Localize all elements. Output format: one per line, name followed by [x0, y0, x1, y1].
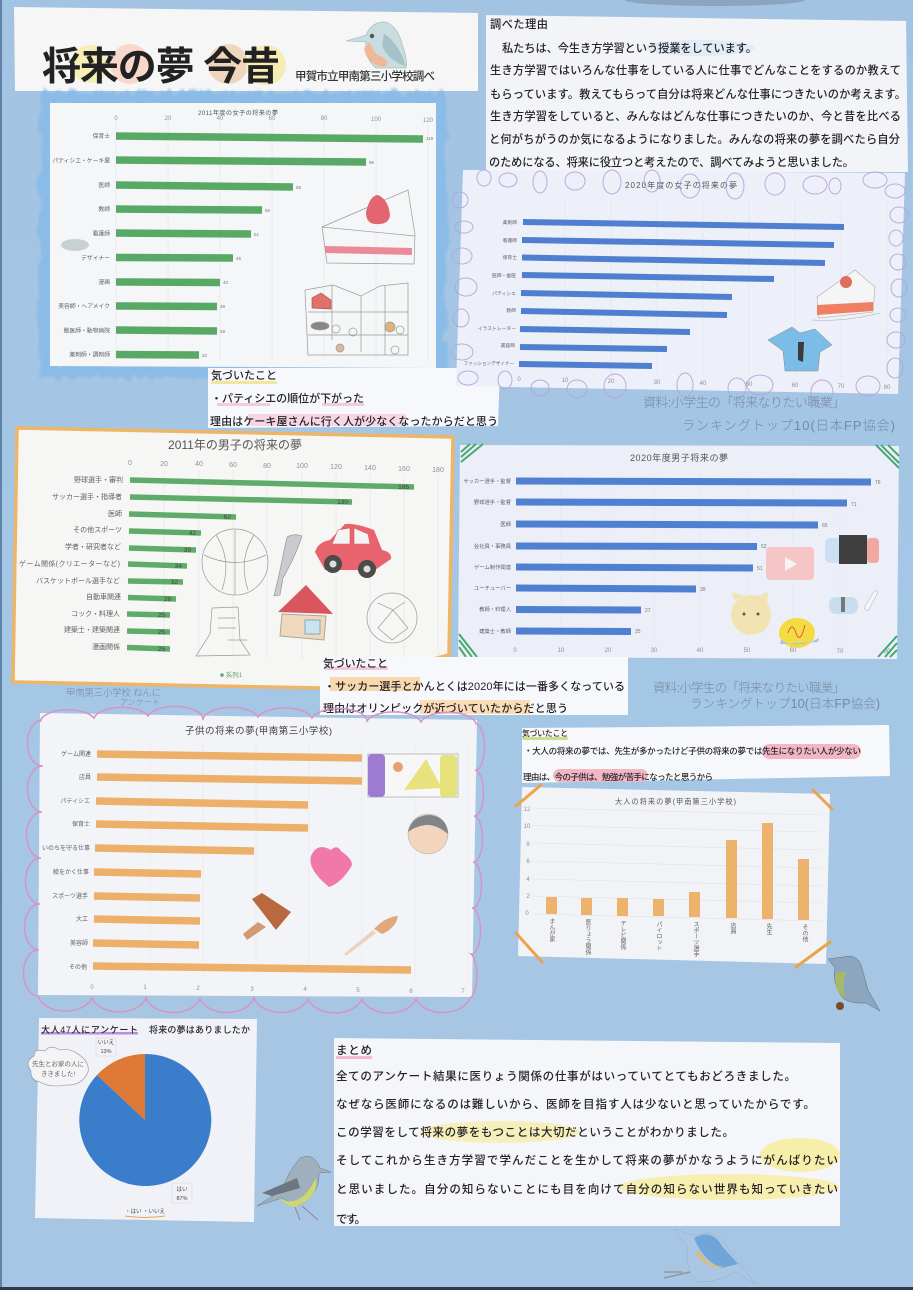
chart: adults: 8 — [526, 842, 530, 848]
panel: reason for research — [486, 15, 908, 172]
labels: ユーチューバー — [474, 585, 511, 592]
category labels: 獣医師・動物病院 — [64, 326, 110, 334]
axis: 3 — [250, 987, 254, 993]
label no — [96, 1038, 116, 1056]
paragraph: 生き方学習ではいろんな仕事をしている人に仕事でどんなことをするのか教えて — [490, 63, 901, 77]
category labels: デザイナー — [81, 254, 110, 262]
body text: この学習をして将来の夢をもつことは大切だということがわかりました。 — [336, 1125, 734, 1139]
note: boys: 理由はオリンピックが近づいていたからだと思う — [323, 701, 568, 715]
labels: スポーツ選手 — [52, 892, 88, 900]
labels: 教師・料理人 — [479, 605, 512, 613]
axis: 1 — [143, 985, 147, 991]
paragraph — [489, 41, 906, 169]
labels: 大工 — [76, 915, 88, 923]
axis: 20 — [605, 648, 612, 654]
axis: 50 — [746, 382, 753, 388]
category labels: 教師 — [98, 205, 110, 213]
category labels — [52, 132, 110, 358]
handwritten survey note: 甲南第三小学校 ねんに — [66, 687, 161, 699]
values: 39 — [184, 547, 191, 554]
source note: lower: 資料:小学生の「将来なりたい職業」 — [653, 681, 845, 695]
values: 51 — [254, 232, 260, 237]
chart: 2011 girls: 60 — [269, 116, 276, 122]
drawing: cake and shirt — [768, 270, 880, 371]
source note: upper — [643, 395, 895, 433]
icon: bird bottom left — [257, 1156, 331, 1220]
icon: kingfisher top — [346, 22, 406, 68]
body text: そしてこれから生き方学習で学んだことを生かして将来の夢がかなうようにがんばりたい — [336, 1153, 838, 1167]
category labels: 看護師 — [93, 230, 110, 238]
drawing: game console, face, heart, hammer, brush — [243, 754, 458, 956]
values: 52 — [761, 544, 767, 550]
labels: その他 — [801, 924, 808, 943]
chart: 2020 girls — [451, 170, 908, 404]
panel: pie chart survey — [28, 1018, 257, 1222]
bars — [519, 222, 844, 366]
chart: adults: 2 — [526, 894, 530, 900]
labels: 漫画関係 — [92, 642, 120, 651]
axis: 20 — [608, 379, 615, 385]
labels: サッカー選手・監督 — [463, 477, 512, 485]
values: 27 — [645, 608, 651, 614]
labels: ファッションデザイナー — [464, 360, 514, 367]
chart: 2020 boys — [458, 444, 899, 659]
axis: 50 — [744, 648, 751, 654]
values: 65 — [822, 523, 828, 529]
values: 42 — [189, 530, 196, 537]
panel: title — [14, 7, 478, 91]
labels — [19, 475, 123, 651]
category labels: 漫画 — [98, 278, 110, 286]
paragraph: と何がちがうのか気になるようになりました。みんなの将来の夢を調べたら自分 — [489, 132, 900, 146]
axis: 7 — [461, 989, 465, 995]
chart: 2011 boys — [13, 428, 453, 688]
values: 39 — [220, 304, 226, 309]
bars — [546, 823, 809, 920]
values: 76 — [875, 480, 881, 486]
chart: 2011 boys: 100 — [296, 463, 308, 470]
chart: 2011 boys: 60 — [229, 462, 237, 469]
note: adults vs children — [522, 725, 890, 783]
chart: 2011 boys: 80 — [263, 463, 271, 470]
chart: 2011 girls: 40 — [217, 116, 224, 122]
labels: 野球選手・審判 — [74, 475, 123, 484]
axis: 30 — [654, 380, 661, 386]
values: 166 — [398, 484, 409, 491]
category labels: 保育士 — [93, 132, 110, 140]
values: 25 — [158, 646, 165, 653]
values: 25 — [635, 629, 641, 635]
labels: 店員 — [79, 774, 91, 781]
icon: kingfisher bottom — [664, 1229, 756, 1284]
chart: 2011 girls: 0 — [114, 116, 118, 122]
heading — [41, 1032, 138, 1034]
values: 25 — [158, 629, 165, 636]
labels: パイロット — [655, 921, 662, 951]
labels: ゲーム制作関連 — [474, 563, 512, 571]
labels: ゲーム関連 — [61, 750, 91, 758]
values: 119 — [426, 136, 434, 141]
source note: lower — [653, 681, 880, 711]
cloud callout: ききました! — [41, 1070, 75, 1078]
labels: 教師 — [506, 307, 516, 314]
values: 56 — [265, 208, 271, 213]
bars — [127, 480, 414, 649]
labels: 絵をかく仕事 — [53, 868, 89, 876]
labels: 店員 — [729, 922, 736, 935]
note: 2011-2020 girls: 気づいたこと — [211, 368, 277, 382]
scalloped border — [23, 706, 485, 1013]
axis: 5 — [356, 988, 360, 994]
labels: コック・料理人 — [71, 609, 120, 618]
note: boys: ・サッカー選手とかんとくは2020年には一番多くなっている — [324, 679, 625, 693]
orange tape corners — [516, 785, 832, 967]
legend: ・はい ・いいえ — [125, 1208, 165, 1215]
body text: です。 — [336, 1213, 366, 1226]
category labels: 医師 — [98, 181, 110, 189]
axis: 30 — [651, 648, 658, 654]
legend: ■ 系列1 — [220, 671, 243, 679]
labels: バスケットボール選手など — [36, 576, 120, 585]
labels: その他 — [69, 963, 87, 971]
decoration: purple loops — [451, 170, 908, 404]
labels — [463, 477, 512, 635]
heading: まとめ — [336, 1044, 372, 1057]
chart: adults: 10 — [524, 824, 531, 830]
axis: 2 — [196, 986, 200, 992]
values: 68 — [296, 185, 302, 190]
labels: 医師 — [500, 520, 512, 528]
axis: 0 — [90, 985, 94, 991]
axis — [517, 377, 891, 391]
values: 62 — [224, 514, 231, 521]
chart: 2011 boys: 160 — [398, 466, 410, 473]
chart: adults: 12 — [524, 807, 531, 813]
body text — [336, 1069, 838, 1226]
chart: adults: 6 — [526, 859, 530, 865]
panel: pie chart survey: 大人47人にアンケート — [41, 1024, 138, 1035]
chart: 2011 boys: 40 — [195, 461, 203, 468]
note: 2011-2020 girls: 理由はケーキ屋さんに行く人が少なくなったからだと思う — [210, 414, 498, 428]
title text: 将来の夢 今昔 — [42, 46, 280, 89]
paragraph: もらっています。教えてもらって自分は将来どんな仕事につきたいのか考えます。 — [490, 87, 906, 101]
axis: 40 — [697, 648, 704, 654]
handwritten survey note: アンケート — [120, 698, 160, 707]
labels: 先生 — [765, 922, 772, 935]
chart: 2011 girls: 100 — [371, 117, 382, 123]
body text: と思いました。自分の知らないことにも目を向けて自分の知らない世界も知っていきたい — [336, 1182, 838, 1196]
labels: 看護師 — [503, 237, 517, 244]
note: boys — [320, 656, 628, 715]
axis: 80 — [884, 385, 891, 391]
label no: いいえ — [98, 1039, 114, 1046]
values: 40 — [223, 280, 229, 285]
values: 28 — [164, 596, 171, 603]
values: 45 — [236, 256, 242, 261]
bars — [516, 481, 871, 632]
category labels: 美容師・ヘアメイク — [58, 302, 110, 310]
values: 51 — [757, 566, 763, 572]
chart title: 2020年度男子将来の夢 — [630, 452, 728, 463]
labels: 野球選手・監督 — [474, 498, 512, 506]
values: 71 — [851, 502, 857, 508]
values: 25 — [158, 612, 165, 619]
chart: 2011 girls — [46, 99, 439, 371]
labels: 薬剤師 — [503, 219, 517, 226]
note: 2011-2020 girls — [208, 368, 500, 428]
labels — [548, 918, 808, 958]
bars — [116, 136, 423, 355]
axis: 60 — [790, 648, 797, 654]
chart: 2011 boys: 180 — [432, 467, 444, 474]
axis: 60 — [792, 383, 799, 389]
labels: 学者・研究者など — [65, 542, 121, 551]
chart title: 2011年度の女子の将来の夢 — [198, 109, 278, 117]
axis: 0 — [517, 377, 521, 383]
chart title: 2020年度の女子の将来の夢 — [625, 180, 737, 190]
paragraph: 生き方学習をしていると、みんなはどんな仕事につきたいのか、今と昔を比べる — [490, 109, 901, 123]
labels: 会社員・事務員 — [474, 542, 512, 550]
axis: 70 — [837, 649, 844, 655]
labels: 美容師 — [501, 342, 515, 349]
cloud callout: 先生とお家の人に — [32, 1059, 84, 1068]
corner stripes — [459, 444, 899, 657]
values: 32 — [171, 579, 178, 586]
values: 34 — [175, 563, 182, 570]
bars — [93, 754, 411, 970]
chart: 2011 boys: 120 — [330, 464, 342, 471]
labels: パティシエ — [60, 798, 90, 805]
source note: upper: 資料:小学生の「将来なりたい職業」 — [643, 395, 845, 410]
axis: 10 — [562, 378, 569, 384]
label no: 13% — [100, 1049, 112, 1055]
pie — [79, 1054, 211, 1186]
chart: 2011 girls: 120 — [423, 118, 434, 124]
chart title: 2011年の男子の将来の夢 — [168, 438, 302, 452]
labels: 美容師 — [70, 939, 88, 947]
chart: 2011 girls: 80 — [321, 116, 328, 122]
labels: 建築士・教師 — [479, 627, 512, 635]
values — [635, 480, 881, 635]
axis — [513, 648, 891, 655]
heading: 調べた理由 — [490, 17, 548, 31]
panel: summary — [334, 1038, 840, 1226]
body text: 全てのアンケート結果に医りょう関係の仕事がはいっていてとてもおどろきました。 — [336, 1069, 796, 1083]
labels: 医りょう関係 — [584, 919, 591, 956]
values: 39 — [220, 329, 226, 334]
labels: 建築士・建築関連 — [64, 625, 120, 634]
labels: ゲーム関係(クリエーターなど) — [19, 559, 120, 568]
chart: adults — [516, 785, 832, 967]
labels: 自動車関連 — [86, 592, 121, 601]
axis: 40 — [700, 381, 707, 387]
drawing: cake — [322, 190, 415, 264]
label yes: 87% — [176, 1196, 188, 1202]
drawing: manga — [305, 283, 408, 355]
labels — [42, 750, 91, 971]
category labels: パティシエ・ケーキ屋 — [52, 158, 110, 164]
axis — [90, 985, 465, 995]
axis: 4 — [303, 987, 307, 993]
labels: イラストレーター — [478, 325, 516, 332]
labels: 保育士 — [503, 254, 517, 261]
note: 2011-2020 girls: ・パティシエの順位が下がった — [211, 391, 364, 405]
labels: 医師 — [108, 509, 122, 518]
labels: いのちを守る仕事 — [42, 844, 90, 852]
values: 130 — [337, 499, 348, 506]
label yes: はい — [176, 1186, 188, 1193]
values: 96 — [369, 160, 375, 165]
labels: スポーツ選手 — [692, 921, 699, 958]
chart title: 大人の将来の夢(甲南第三小学校) — [615, 797, 736, 806]
labels: サッカー選手・指導者 — [52, 492, 122, 501]
note: adults vs children: 理由は、今の子供は、勉強が苦手になったと思うから — [523, 772, 713, 782]
drawing: video, console, cat, omelet, whistle — [731, 535, 879, 648]
chart: adults: 0 — [525, 911, 529, 917]
note: adults vs children: ・大人の将来の夢では、先生が多かったけど子供の将来の夢では先生になりたい人が少ない — [524, 746, 861, 756]
chart: adults: 4 — [526, 877, 530, 883]
values — [202, 136, 434, 358]
labels: 医師・歯医 — [492, 272, 516, 279]
labels: テレビ関係 — [619, 920, 626, 951]
chart: 2011 boys: 140 — [364, 465, 376, 472]
axis: 10 — [558, 648, 565, 654]
drawing: basketball, bat, car, house, soccer ball, shoe — [196, 524, 417, 656]
chart: 2011 boys: 20 — [160, 461, 168, 468]
labels: その他スポーツ — [73, 525, 122, 534]
chart: children of the school — [23, 706, 485, 1013]
note: adults vs children: 気づいたこと — [522, 728, 568, 738]
axis: 80 — [884, 649, 891, 655]
values: 39 — [700, 587, 706, 593]
labels: 保育士 — [72, 820, 90, 828]
panel: pie chart survey: 将来の夢はありましたか — [149, 1024, 250, 1035]
chart: 2011 boys: 0 — [128, 460, 132, 467]
chart title: 子供の将来の夢(甲南第三小学校) — [185, 725, 332, 737]
cloud callout — [28, 1047, 88, 1086]
labels — [464, 219, 517, 367]
legend — [125, 1208, 165, 1218]
paragraph: 私たちは、今生き方学習という授業をしています。 — [502, 41, 757, 55]
values — [158, 484, 409, 653]
values: 32 — [202, 353, 208, 358]
icon: bird right — [828, 956, 880, 1011]
body text: なぜなら医師になるのは難しいから、医師を目指す人は少ないと思っていたからです。 — [336, 1097, 815, 1111]
handwritten survey note — [66, 687, 161, 707]
category labels: 薬剤師・調剤師 — [69, 350, 110, 358]
axis: 6 — [409, 989, 413, 995]
axis: 0 — [513, 648, 517, 654]
paragraph: のためになる、将来に役立つと考えたので、調べてみようと思いました。 — [489, 155, 854, 169]
labels: パティシエ — [492, 291, 516, 297]
label yes — [172, 1183, 192, 1203]
chart: 2011 girls: 20 — [165, 116, 172, 122]
labels: まんが家 — [548, 918, 555, 943]
source note: upper: ランキングトップ10(日本FP協会) — [682, 418, 895, 433]
source note: lower: ランキングトップ10(日本FP協会) — [690, 697, 880, 711]
axis: 70 — [838, 384, 845, 390]
subtitle: 甲賀市立甲南第三小学校調べ — [295, 69, 435, 83]
note: boys: 気づいたこと — [323, 656, 388, 670]
